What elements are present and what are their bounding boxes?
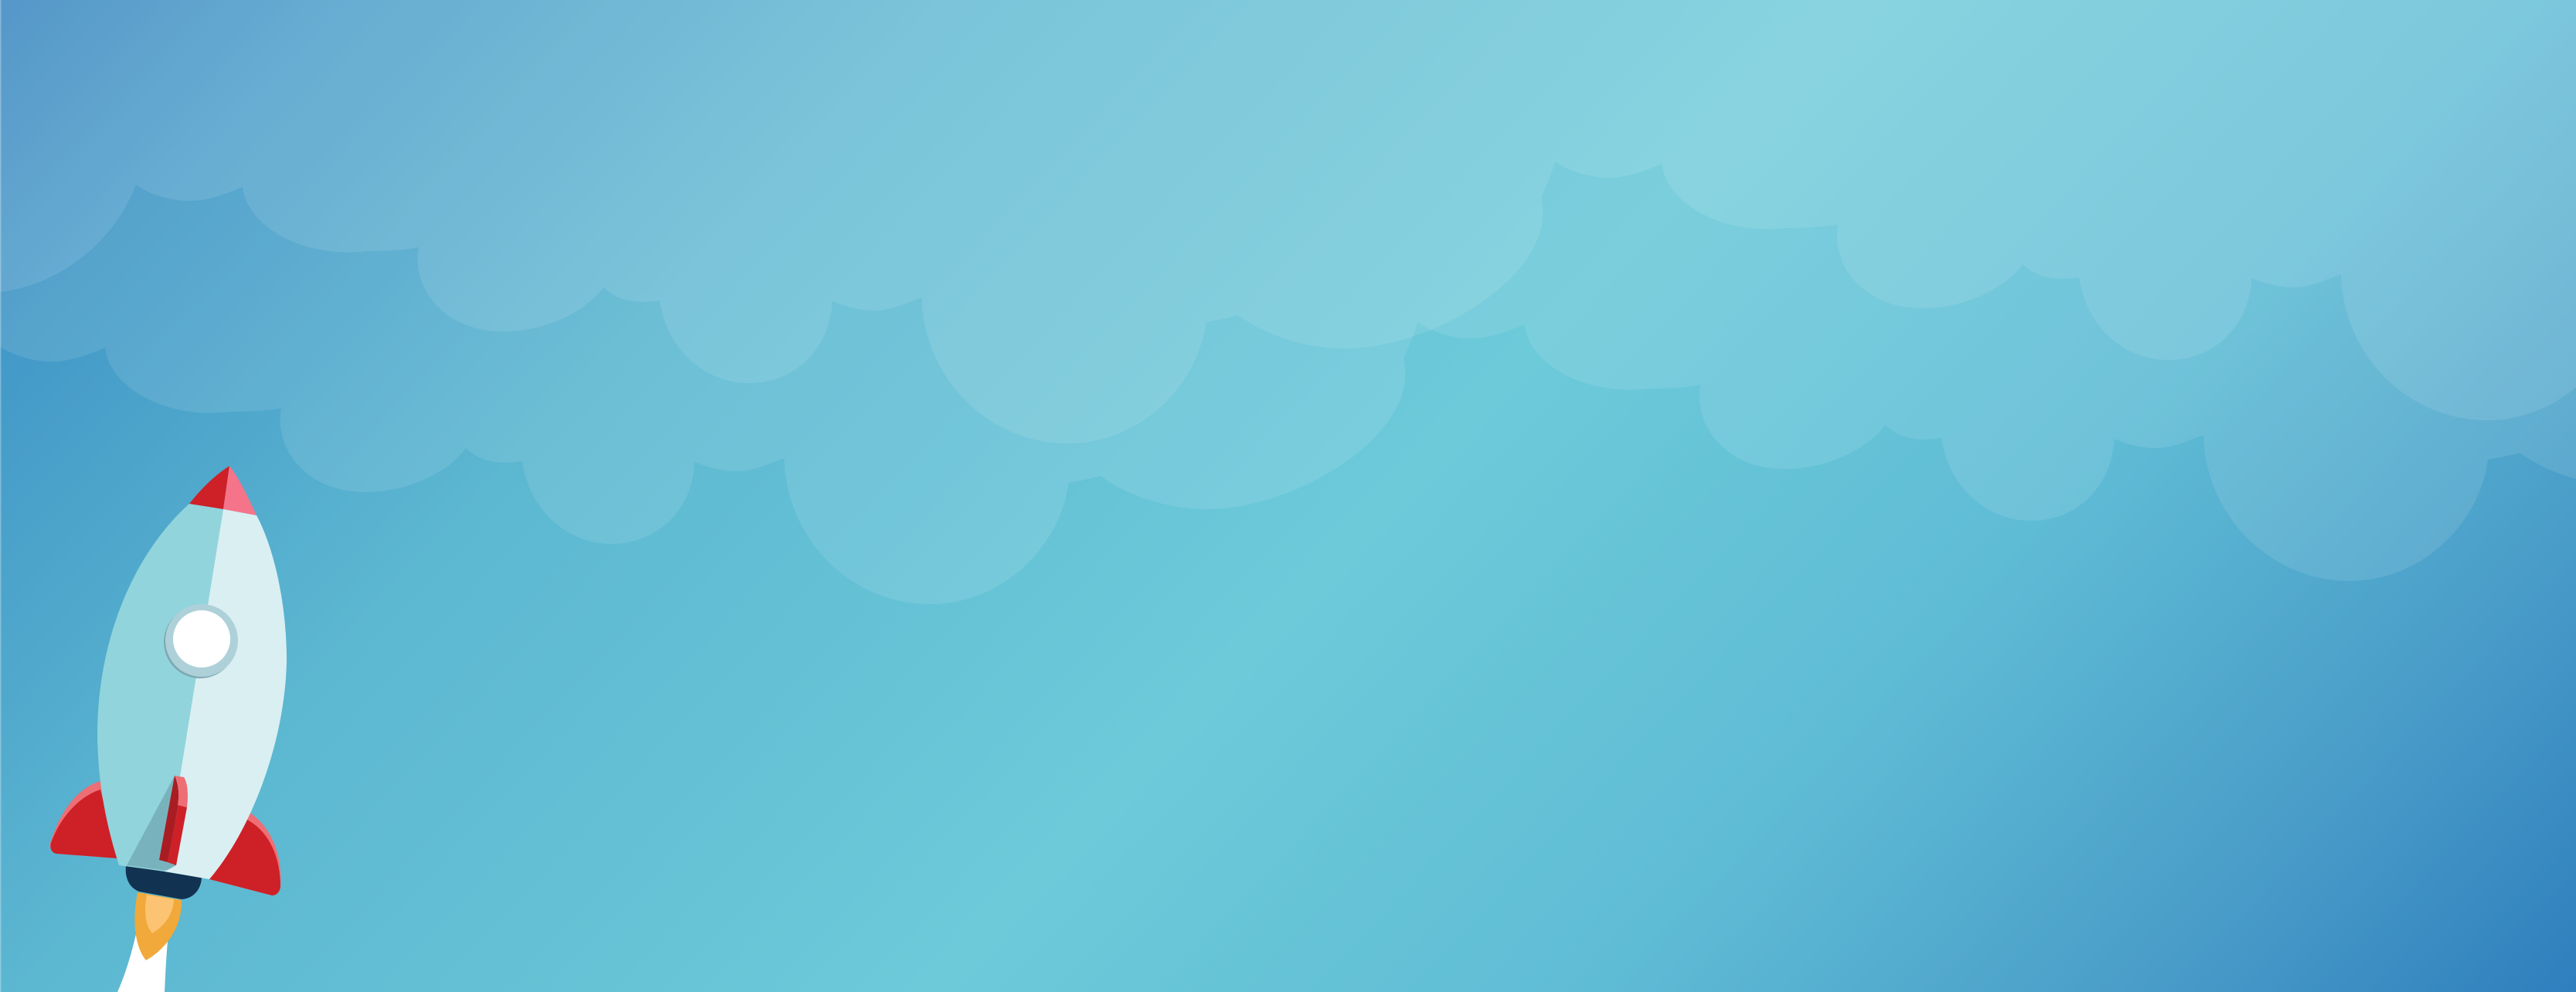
upper cloud layer (0, 0, 2576, 443)
right fin (209, 813, 280, 895)
window ring shadow (164, 606, 236, 678)
center fin shadow (127, 776, 176, 871)
window ring (165, 604, 238, 677)
flame outer (134, 892, 182, 960)
center fin pink tip (175, 776, 188, 807)
engine nozzle (126, 865, 202, 899)
body shaded half (97, 504, 223, 871)
right fin highlight (209, 813, 280, 895)
lower cloud layer (0, 0, 2576, 604)
exhaust trail (117, 934, 168, 992)
nose cone pink side (223, 466, 257, 515)
window glass (173, 610, 230, 668)
flame inner (145, 895, 174, 933)
left fin highlight (50, 781, 117, 858)
center fin dark side (159, 776, 178, 862)
left fin body (50, 790, 117, 858)
body light half (165, 509, 287, 879)
porthole window (164, 604, 238, 678)
center fin (159, 776, 188, 865)
left edge highlight (0, 0, 2, 992)
right fin body (209, 820, 280, 895)
rocket (50, 466, 287, 992)
nose cone red side (189, 466, 229, 509)
left fin (50, 781, 117, 858)
center fin red face (168, 805, 187, 865)
